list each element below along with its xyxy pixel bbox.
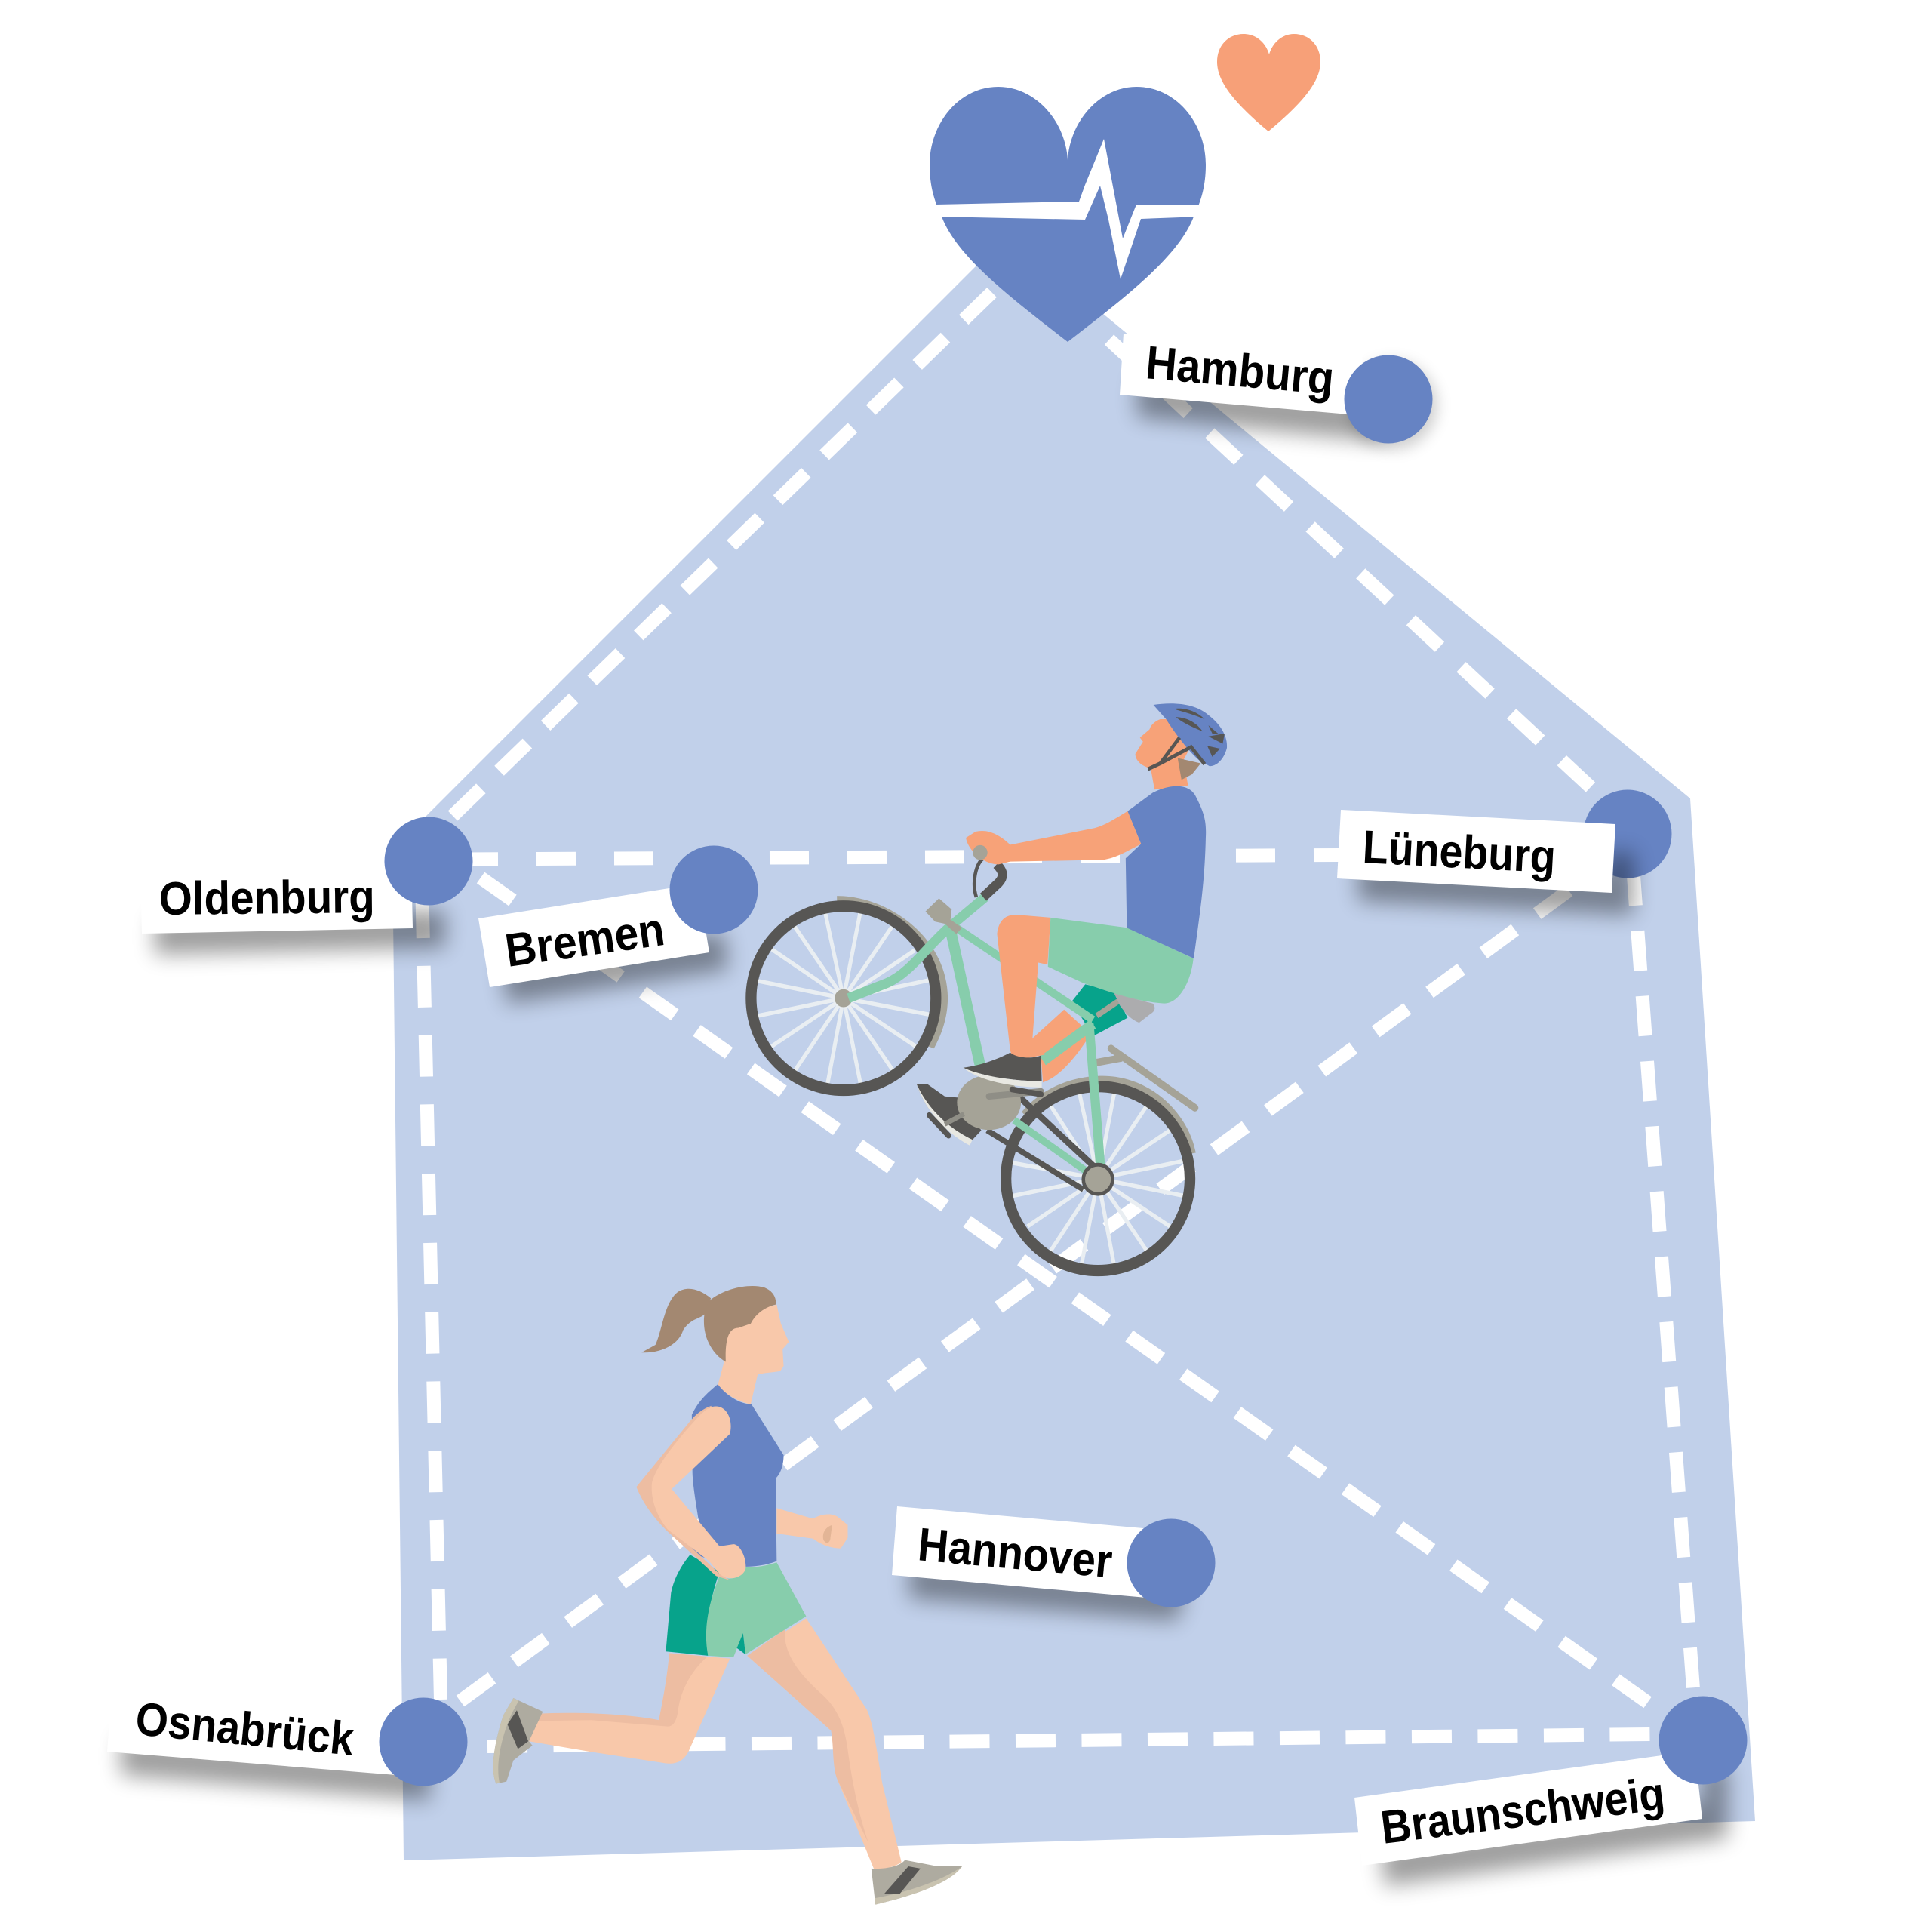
front leg [747,1618,902,1869]
illustration: cyclist on bicycle [751,703,1227,1271]
city: Lüneburg: Lüneburg [1361,821,1557,883]
near leg [997,915,1050,1061]
back leg [529,1653,730,1764]
saddle [1097,993,1154,1023]
shorts [666,1555,806,1657]
grip [973,845,988,860]
city: Hamburg [1120,334,1437,449]
city: Bremen: Bremen [502,903,668,977]
city: Hamburg: Hamburg [1144,337,1336,405]
dashed route network [423,292,1693,1746]
near arm [636,1405,745,1580]
handlebar and stem [926,858,1002,934]
city: Braunschweig [1354,1697,1748,1886]
chain [987,1091,1097,1189]
city: Hannover [892,1506,1215,1621]
hair [1178,758,1200,780]
city: Osnabrück [107,1684,468,1801]
city: Lüneburg [1337,789,1672,915]
arm [966,811,1141,864]
illustration: female runner [493,1286,962,1905]
far arm [776,1508,847,1549]
city: Oldenburg: Oldenburg [158,871,375,925]
city: Osnabrück: Osnabrück [134,1693,356,1766]
city: Braunschweig: Braunschweig [1378,1767,1668,1854]
front shoe [872,1860,962,1905]
upper shoe [964,1053,1042,1088]
hair [704,1286,776,1361]
far shorts [1071,984,1127,1036]
face and neck [718,1305,789,1404]
frame [848,897,1101,1174]
icon: small peach heart [1217,34,1320,131]
crank [930,1075,1041,1136]
city: Oldenburg [140,817,472,955]
neck and face [1136,719,1191,789]
city: Hannover: Hannover [916,1518,1114,1588]
lower shoe [917,1084,982,1146]
rear wheel [1006,1048,1196,1271]
helmet [1148,703,1227,769]
panel: house-shaped region [392,235,1755,1860]
shirt [690,1384,784,1567]
front wheel [751,896,948,1091]
shorts [1048,918,1194,1004]
back shoe [493,1698,543,1783]
shirt [1126,786,1206,958]
ponytail [641,1289,711,1352]
far leg [1032,1010,1091,1082]
city: Bremen [478,845,758,1004]
rear hub [1084,1164,1112,1194]
icon: big heart with pulse line [930,87,1206,342]
